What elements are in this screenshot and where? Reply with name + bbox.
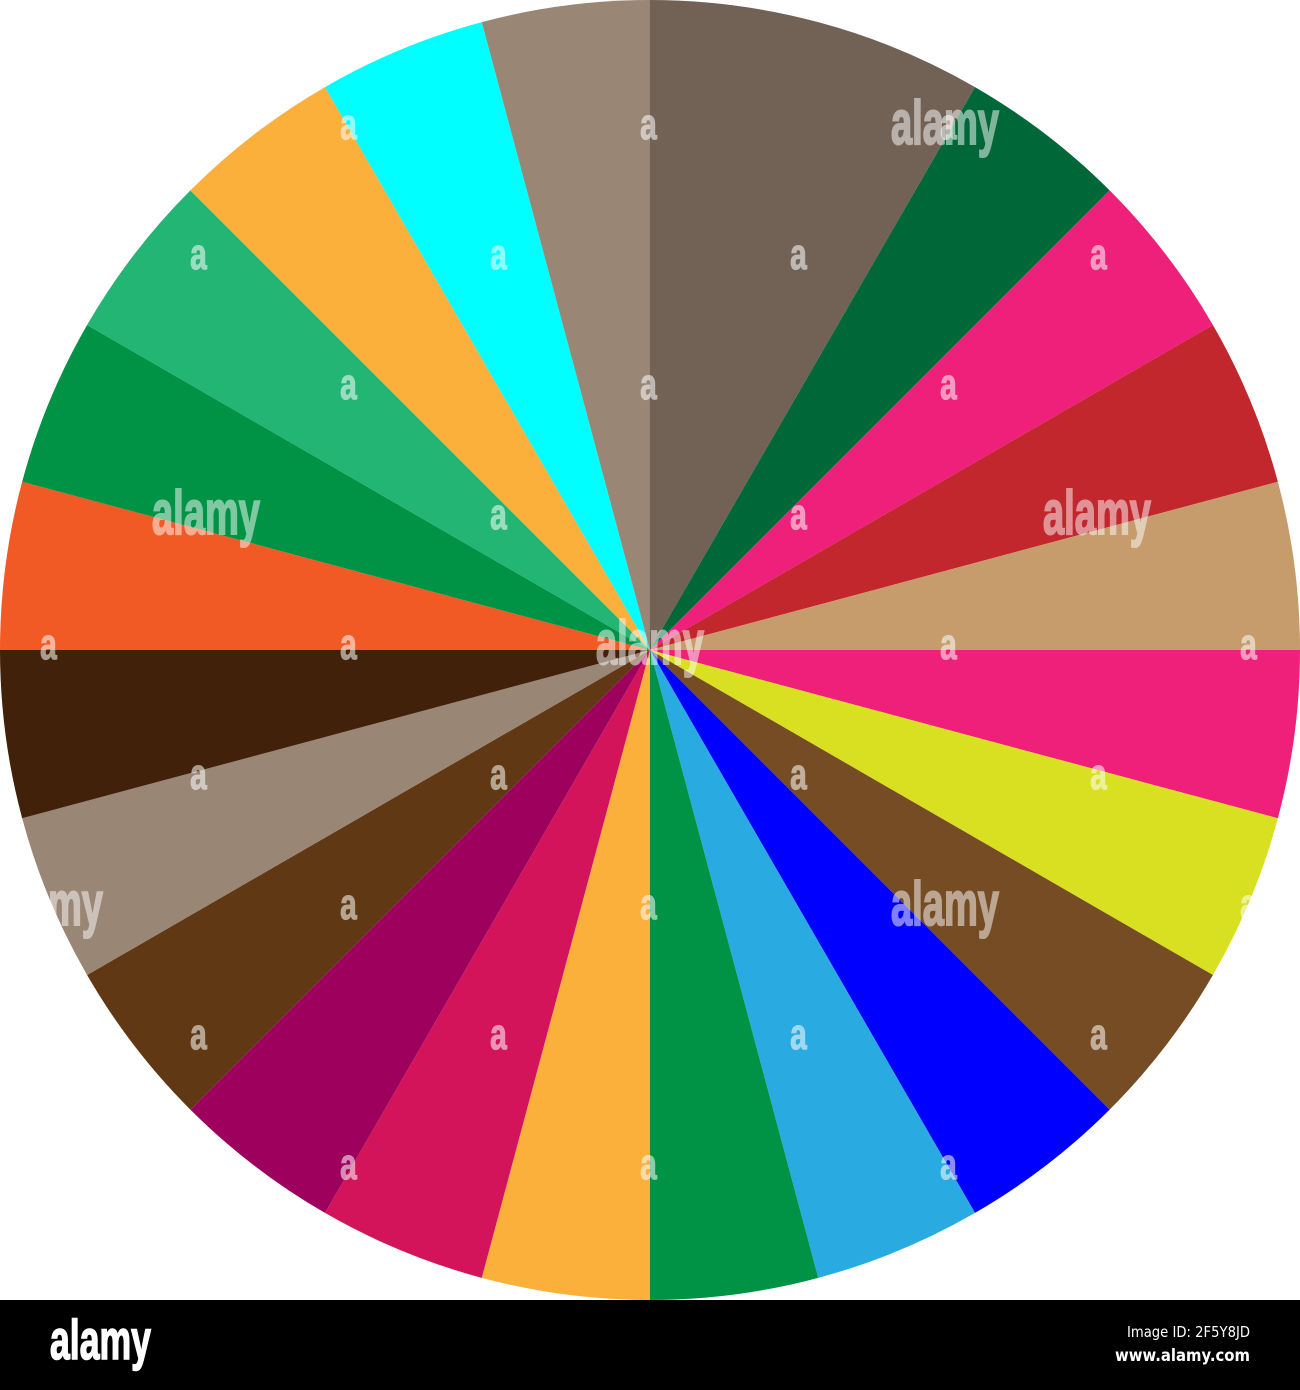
slice: mid brown bbox=[650, 650, 1213, 1110]
watermark: small letter grid: a bbox=[490, 229, 508, 278]
watermark: small letter grid: a bbox=[340, 99, 358, 148]
watermark: alamy right: alamy bbox=[1043, 479, 1151, 548]
slice: orange bbox=[190, 87, 650, 650]
slice: dark green bbox=[650, 87, 1110, 650]
watermark: small letter grid: a bbox=[490, 1009, 508, 1058]
watermark: small letter grid: a bbox=[940, 99, 958, 148]
slice: orange bbox=[482, 650, 650, 1300]
watermark: small letter grid: a bbox=[1090, 229, 1108, 278]
watermark: small letter grid: a bbox=[940, 1139, 958, 1188]
footer bar bbox=[0, 1300, 1300, 1390]
watermark: alamy centre: alamy bbox=[596, 609, 704, 678]
watermark: alamy lower left, clipped by the edge: alamy bbox=[0, 870, 103, 939]
website address: www.alamy.com bbox=[1115, 1346, 1250, 1366]
watermark: small letter grid: a bbox=[940, 619, 958, 668]
watermark: small letter grid: a bbox=[640, 99, 658, 148]
watermark: small letter grid: a bbox=[640, 879, 658, 928]
watermark: small letter grid: a bbox=[1090, 749, 1108, 798]
image id: Image ID: 2F5Y8JD bbox=[1127, 1323, 1250, 1341]
slice: yellow bbox=[650, 650, 1278, 975]
watermark: small letter grid: a bbox=[940, 359, 958, 408]
watermark: small letter grid: a bbox=[790, 1009, 808, 1058]
slice: sky blue bbox=[650, 650, 975, 1278]
watermark: small letter grid: a bbox=[640, 359, 658, 408]
slice: grey brown, 30 degrees bbox=[650, 0, 975, 650]
watermark: small letter grid: a bbox=[1090, 1009, 1108, 1058]
slice: red bbox=[650, 325, 1278, 650]
watermark: small letter grid: a bbox=[790, 489, 808, 538]
watermark: small letter grid: a bbox=[790, 749, 808, 798]
slice: magenta pink bbox=[650, 190, 1213, 650]
slice: purple bbox=[190, 650, 650, 1213]
watermark: small letter grid: a bbox=[190, 229, 208, 278]
watermark: small letter grid: a bbox=[490, 749, 508, 798]
slice: dark brown bbox=[0, 650, 650, 818]
slice: chestnut brown bbox=[87, 650, 650, 1110]
watermark: small letter grid: a bbox=[190, 1009, 208, 1058]
watermark: small letter grid: a bbox=[340, 619, 358, 668]
slice: pink bbox=[650, 650, 1300, 818]
watermark: alamy lower right: alamy bbox=[891, 870, 999, 939]
slice: tan bbox=[650, 482, 1300, 650]
watermark: small letter grid bbox=[40, 99, 1258, 1188]
slice: red orange bbox=[0, 482, 650, 650]
watermark: small letter grid: a bbox=[490, 489, 508, 538]
slice: crimson bbox=[325, 650, 650, 1278]
watermark: small letter grid: a bbox=[190, 749, 208, 798]
watermark: small letter grid: a bbox=[1240, 879, 1258, 928]
slice: cyan bbox=[325, 22, 650, 650]
watermark: alamy left: alamy bbox=[152, 479, 260, 548]
slice: blue bbox=[650, 650, 1110, 1213]
watermark: alamy top right: alamy bbox=[891, 89, 999, 158]
watermark: small letter grid: a bbox=[1240, 619, 1258, 668]
watermark: small letter grid: a bbox=[340, 879, 358, 928]
watermark: small letter grid: a bbox=[340, 1139, 358, 1188]
slice: green bbox=[22, 325, 650, 650]
slice: light green bbox=[87, 190, 650, 650]
watermark: small letter grid: a bbox=[640, 1139, 658, 1188]
slice: green bbox=[650, 650, 818, 1300]
slice: taupe bbox=[22, 650, 650, 975]
watermark: small letter grid: a bbox=[40, 619, 58, 668]
slice: taupe bbox=[482, 0, 650, 650]
footer logo: alamy bbox=[50, 1308, 151, 1371]
watermark: small letter grid: a bbox=[340, 359, 358, 408]
watermark: small letter grid: a bbox=[790, 229, 808, 278]
